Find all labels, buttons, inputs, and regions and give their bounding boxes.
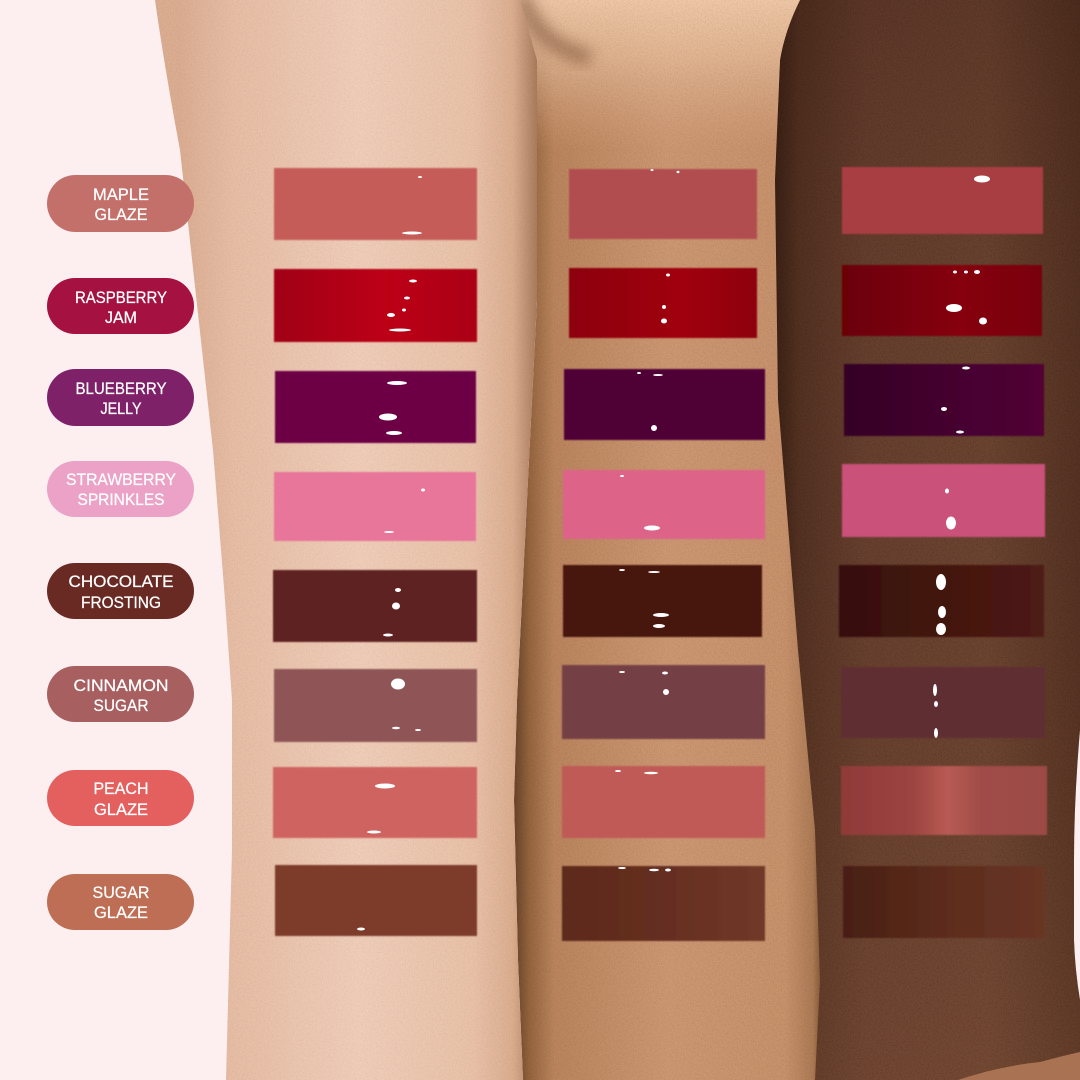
swatch: chocolate frosting: [563, 565, 762, 637]
swatch: cinnamon sugar: [274, 669, 477, 742]
swatch: strawberry sprinkles: [274, 472, 476, 541]
arm: dark skin tone: [770, 0, 1080, 1080]
pill label: maple glaze: GLAZE: [94, 206, 148, 224]
column: dark skin swatches: [839, 167, 1047, 938]
pill label: raspberry jam: RASPBERRY: [75, 289, 167, 307]
pill label: chocolate frosting: CHOCOLATE: [68, 573, 174, 591]
pill label: raspberry jam: [47, 278, 194, 334]
pill label: maple glaze: MAPLE: [93, 186, 149, 204]
swatch: maple glaze: [274, 168, 477, 240]
pill label: sugar glaze: SUGAR: [92, 884, 150, 902]
arm: medium skin tone: [510, 0, 820, 1080]
gloss highlights: [357, 169, 990, 930]
swatch: peach glaze: [562, 766, 765, 838]
swatch: strawberry sprinkles: [842, 464, 1045, 537]
pill label: blueberry jelly: [47, 369, 194, 426]
pill label: sugar glaze: GLAZE: [94, 904, 148, 922]
pill label: strawberry sprinkles: STRAWBERRY: [66, 471, 176, 489]
swatch: chocolate frosting: [839, 565, 1044, 637]
swatch: strawberry sprinkles: [563, 470, 765, 539]
palm at wrist: [958, 1052, 1080, 1080]
column: medium skin swatches: [562, 169, 765, 941]
swatch: maple glaze: [842, 167, 1043, 234]
swatch: raspberry jam: [569, 268, 757, 338]
swatch: cinnamon sugar: [841, 667, 1045, 738]
swatch: peach glaze: [841, 766, 1047, 835]
swatch: raspberry jam: [842, 265, 1042, 336]
pill label: cinnamon sugar: SUGAR: [94, 697, 149, 715]
arm: light skin tone: [155, 0, 537, 1080]
pill label: peach glaze: [47, 770, 194, 826]
pill label: maple glaze: [47, 175, 194, 232]
swatch: chocolate frosting: [273, 570, 477, 642]
swatch: cinnamon sugar: [562, 665, 765, 739]
swatch: sugar glaze: [562, 866, 765, 941]
pill label: chocolate frosting: FROSTING: [81, 594, 161, 612]
pill label: chocolate frosting: [47, 563, 194, 619]
swatch: raspberry jam: [274, 269, 477, 342]
pill label: raspberry jam: JAM: [105, 309, 137, 327]
pill label: strawberry sprinkles: SPRINKLES: [78, 491, 164, 509]
swatch: peach glaze: [273, 767, 477, 838]
pill label: sugar glaze: [47, 874, 194, 930]
swatch: blueberry jelly: [564, 369, 765, 440]
pill label: blueberry jelly: JELLY: [100, 400, 142, 418]
column: light skin swatches: [273, 168, 477, 936]
swatch: sugar glaze: [843, 866, 1044, 938]
wrist crease shadow: [522, 0, 590, 58]
swatch: blueberry jelly: [275, 371, 476, 443]
pill label: peach glaze: PEACH: [94, 780, 148, 798]
pill label: cinnamon sugar: CINNAMON: [74, 677, 168, 695]
swatch: blueberry jelly: [844, 364, 1044, 436]
swatch: sugar glaze: [275, 865, 477, 936]
pill label: peach glaze: GLAZE: [94, 801, 148, 819]
swatch: maple glaze: [569, 169, 757, 239]
pill label: strawberry sprinkles: [47, 461, 194, 517]
pill label: blueberry jelly: BLUEBERRY: [76, 380, 166, 398]
pill label: cinnamon sugar: [47, 666, 194, 722]
